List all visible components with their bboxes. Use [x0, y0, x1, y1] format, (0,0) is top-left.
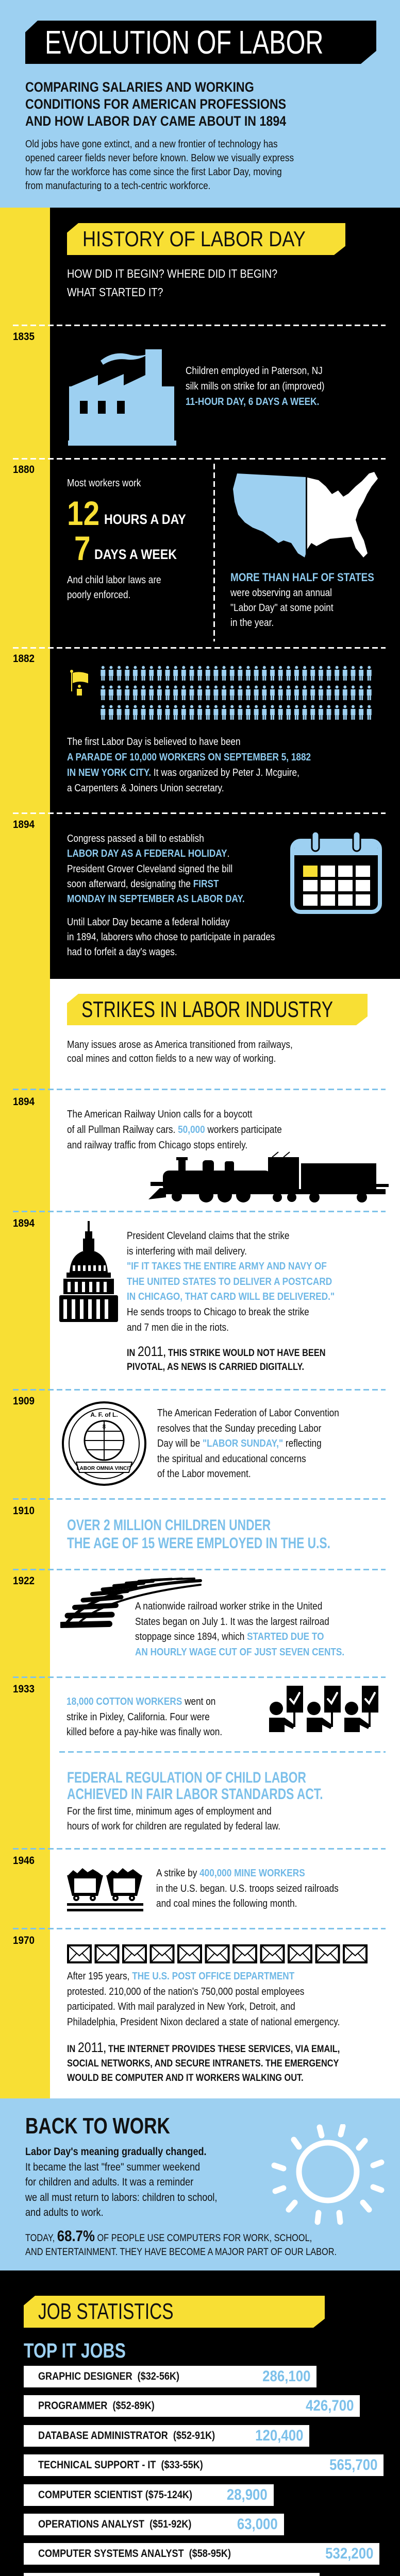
callout: 2011 internet: SOCIAL NETWORKS, AND SECURE INTRANETS. THE EMERGENCY — [67, 2058, 339, 2069]
callout: child labor 1910 — [67, 1517, 330, 1552]
callout: federal regulation: ACHIEVED IN FAIR LABOR STANDARDS ACT. — [67, 1786, 323, 1803]
text 1909: Day will be "LABOR SUNDAY," reflecting — [157, 1438, 322, 1449]
year 1882: 1882 — [13, 653, 35, 665]
intro text: how far the workforce has come since the first Labor Day, moving — [25, 166, 282, 178]
subheading: top IT jobs: TOP IT JOBS — [24, 2340, 126, 2362]
text: more than half of states: MORE THAN HALF OF STATES — [230, 571, 374, 584]
text 1933: 18,000 COTTON WORKERS went on — [66, 1696, 215, 1707]
bar: technical support: TECHNICAL SUPPORT - IT ($33-55K) — [38, 2459, 203, 2471]
callout: 68.7% — [25, 2228, 337, 2258]
callout: child labor 1910: THE AGE OF 15 WERE EMPLOYED IN THE U.S. — [67, 1535, 330, 1552]
bar: database administrator — [24, 2425, 309, 2447]
text: back to work: and adults to work. — [25, 2207, 104, 2218]
callout: 2011 strike — [127, 1344, 326, 1372]
text: 12 hours 7 days: poorly enforced. — [67, 589, 130, 601]
text 1909 — [157, 1408, 339, 1480]
text 1909: The American Federation of Labor Convention — [157, 1408, 339, 1419]
text: back to work: for children and adults. It was a reminder — [25, 2176, 193, 2188]
callout: 68.7%: AND ENTERTAINMENT. THEY HAVE BECOME A MAJOR PART OF OUR LABOR. — [25, 2247, 337, 2258]
icon: US map — [233, 472, 378, 557]
text 1946 — [156, 1868, 339, 1909]
text 1933 — [66, 1696, 222, 1738]
heading: back to work: BACK TO WORK — [25, 2113, 170, 2139]
text 1970: protested. 210,000 of the nation's 750,000 postal employees — [67, 1986, 304, 1997]
icon: calendar — [290, 833, 382, 914]
text cleveland: is interfering with mail delivery. — [127, 1246, 247, 1257]
callout: 2011 internet: IN 2011, THE INTERNET PROVIDES THESE SERVICES, VIA EMAIL, — [67, 2040, 340, 2055]
text: 12 hours 7 days: DAYS A WEEK — [94, 547, 177, 562]
text 1922: States began on July 1. It was the largest railroad — [135, 1616, 329, 1628]
icon: AFL seal: 8 — [103, 1423, 106, 1430]
text: forfeit wages: had to forfeit a day's wages. — [67, 946, 177, 958]
heading: strikes in labor industry: STRIKES IN LABOR INDUSTRY — [81, 997, 333, 1022]
callout: 2011 strike: IN 2011, THIS STRIKE WOULD NOT HAVE BEEN — [127, 1344, 326, 1359]
heading: job statistics: JOB STATISTICS — [38, 2299, 174, 2324]
icon: train — [148, 1151, 389, 1202]
text pullman: of all Pullman Railway cars. 50,000 workers participate — [67, 1124, 282, 1136]
bar: computer systems analyst: 532,200 — [325, 2545, 373, 2562]
bar: database administrator: 120,400 — [255, 2427, 303, 2444]
text: 12 hours 7 days: 7 — [74, 529, 91, 567]
panel: back to work — [0, 2098, 400, 2270]
bar: database administrator: DATABASE ADMINISTRATOR ($52-91K) — [38, 2430, 215, 2442]
questions: HOW DID IT BEGIN? WHERE DID IT BEGIN? — [67, 267, 277, 280]
text 1922: AN HOURLY WAGE CUT OF JUST SEVEN CENTS. — [135, 1647, 344, 1658]
intro text: from manufacturing to a tech-centric workforce. — [25, 180, 210, 192]
icon: sun — [271, 2124, 385, 2225]
text 1946: A strike by 400,000 MINE WORKERS — [156, 1868, 305, 1879]
text 1835: 11-HOUR DAY, 6 DAYS A WEEK. — [186, 396, 319, 408]
text 1909: of the Labor movement. — [157, 1468, 251, 1480]
text 1922: stoppage since 1894, which STARTED DUE TO — [135, 1631, 324, 1642]
icon: AFL seal: A. F. of L. — [90, 1411, 118, 1418]
text: minimum ages — [67, 1806, 280, 1832]
icon: railroad tracks — [60, 1578, 202, 1628]
text: 12 hours 7 days: 12 — [67, 494, 99, 532]
text 1835: Children employed in Paterson, NJ — [186, 365, 323, 377]
questions: WHAT STARTED IT? — [67, 285, 163, 299]
bar: computer systems analyst: COMPUTER SYSTEMS ANALYST ($58-95K) — [38, 2548, 231, 2560]
icon: capitol — [59, 1221, 118, 1322]
subtitle: COMPARING SALARIES AND WORKING — [25, 79, 254, 95]
text: more than half of states: in the year. — [230, 617, 274, 629]
icon: factory — [68, 349, 176, 446]
callout: federal regulation: FEDERAL REGULATION OF CHILD LABOR — [67, 1769, 306, 1786]
year 1894: 1894 — [13, 819, 35, 831]
text: minimum ages: hours of work for children are regulated by federal law. — [67, 1821, 280, 1832]
bar: operations analyst: 63,000 — [237, 2516, 278, 2533]
text cleveland: He sends troops to Chicago to break the strike — [127, 1307, 309, 1318]
background: intro — [0, 0, 400, 208]
callout: 2011 internet: WOULD BE COMPUTER AND IT WORKERS WALKING OUT. — [67, 2073, 304, 2083]
text 1882: a Carpenters & Joiners Union secretary. — [67, 783, 224, 794]
icon: flag bearer — [70, 670, 88, 696]
text cleveland: IN CHICAGO, THAT CARD WILL BE DELIVERED." — [127, 1291, 335, 1302]
text 1933: killed before a pay-hike was finally won. — [66, 1726, 222, 1738]
subtitle: AND HOW LABOR DAY CAME ABOUT IN 1894 — [25, 113, 286, 129]
yellow timeline strip — [0, 208, 50, 2098]
text 1882: A PARADE OF 10,000 WORKERS ON SEPTEMBER 5, 1882 — [67, 752, 311, 763]
text: 12 hours 7 days: And child labor laws are — [67, 574, 161, 586]
subtitle: CONDITIONS FOR AMERICAN PROFESSIONS — [25, 96, 286, 112]
text: back to work — [25, 2146, 217, 2218]
heading: strikes in labor industry — [67, 994, 368, 1025]
bar: operations analyst — [24, 2514, 284, 2535]
year 1933: 1933 — [13, 1683, 35, 1695]
text: more than half of states: were observing an annual — [230, 587, 332, 599]
bar: computer scientist: 28,900 — [227, 2486, 268, 2503]
title — [25, 21, 376, 64]
year 1835: 1835 — [13, 331, 35, 343]
year 1880: 1880 — [13, 464, 35, 476]
year 1922: 1922 — [13, 1575, 35, 1587]
text 1882: IN NEW YORK CITY. It was organized by Peter J. Mcguire, — [67, 767, 299, 778]
text cleveland: President Cleveland claims that the strike — [127, 1230, 289, 1242]
text 1894 federal holiday: LABOR DAY AS A FEDERAL HOLIDAY. — [67, 848, 229, 859]
text 1922 — [135, 1601, 344, 1658]
text 1894 federal holiday: Congress passed a bill to establish — [67, 833, 204, 844]
text 1894 federal holiday: soon afterward, designating the FIRST — [67, 878, 219, 890]
text cleveland: "IF IT TAKES THE ENTIRE ARMY AND NAVY OF — [127, 1261, 327, 1272]
text 1835 — [186, 365, 325, 408]
text: 12 hours 7 days: Most workers work — [67, 478, 141, 489]
year 1910: 1910 — [13, 1505, 35, 1517]
bar: programmer: 426,700 — [306, 2397, 354, 2414]
bar: graphic designer: GRAPHIC DESIGNER ($32-56K) — [38, 2370, 179, 2382]
icon: protesters — [269, 1686, 378, 1732]
bar: network systems analyst — [24, 2573, 320, 2576]
panel: history of labor day — [50, 208, 400, 979]
callout: federal regulation — [67, 1769, 323, 1803]
heading: job statistics — [24, 2296, 325, 2328]
bar chart: top IT jobs — [24, 2366, 384, 2576]
year 1946: 1946 — [13, 1855, 35, 1867]
bar: computer scientist: COMPUTER SCIENTIST ($75-124K) — [38, 2489, 192, 2501]
text 1970: After 195 years, THE U.S. POST OFFICE DEPARTMENT — [67, 1971, 294, 1982]
text cleveland — [127, 1230, 335, 1333]
title: EVOLUTION OF LABOR — [45, 24, 324, 61]
chart: crowd of 10,000 workers — [101, 666, 372, 720]
text 1970: Philadelphia, President Nixon declared a state of national emergency. — [67, 2016, 340, 2028]
text 1909: resolves that the Sunday preceding Labor — [157, 1423, 321, 1434]
text 1922: A nationwide railroad worker strike in the United — [135, 1601, 322, 1612]
bar: technical support — [24, 2454, 384, 2476]
bar: computer scientist — [24, 2484, 274, 2506]
text: forfeit wages — [67, 917, 275, 958]
text 1894 federal holiday: President Grover Cleveland signed the bill — [67, 863, 232, 875]
bar: graphic designer — [24, 2366, 316, 2387]
questions — [67, 267, 277, 299]
callout: 2011 internet — [67, 2040, 340, 2083]
text: 12 hours 7 days: HOURS A DAY — [104, 512, 186, 527]
icon: coal carts — [67, 1868, 143, 1911]
text: 12 hours 7 days — [67, 478, 186, 601]
text: forfeit wages: in 1894, laborers who chose to participate in parades — [67, 931, 275, 943]
heading: history of labor day: HISTORY OF LABOR DAY — [82, 227, 306, 251]
strikes intro: Many issues arose as America transitioned from railways, — [67, 1039, 293, 1050]
bar: graphic designer: 286,100 — [262, 2368, 310, 2385]
bar: operations analyst: OPERATIONS ANALYST ($51-92K) — [38, 2518, 191, 2530]
text 1946: and coal mines the following month. — [156, 1898, 297, 1909]
text: more than half of states: "Labor Day" at some point — [230, 602, 334, 614]
text cleveland: and 7 men die in the riots. — [127, 1322, 229, 1333]
callout: 68.7%: TODAY, 68.7% OF PEOPLE USE COMPUTERS FOR WORK, SCHOOL, — [25, 2228, 312, 2245]
text 1835: silk mills on strike for an (improved) — [186, 381, 325, 392]
text: back to work: we all must return to labors: children to school, — [25, 2192, 217, 2203]
strikes intro — [67, 1039, 293, 1064]
text pullman: The American Railway Union calls for a boycott — [67, 1109, 252, 1120]
text: forfeit wages: Until Labor Day became a federal holiday — [67, 917, 230, 928]
panel: job statistics — [0, 2270, 400, 2576]
intro text — [25, 139, 294, 192]
year 1909: 1909 — [13, 1395, 35, 1407]
intro text: Old jobs have gone extinct, and a new frontier of technology has — [25, 139, 278, 150]
intro text: opened career fields never before known. Below we visually express — [25, 152, 294, 164]
heading: history of labor day — [67, 223, 345, 255]
text 1946: in the U.S. began. U.S. troops seized railroads — [156, 1883, 339, 1894]
icon: AFL seal — [62, 1401, 146, 1486]
text: minimum ages: For the first time, minimum ages of employment and — [67, 1806, 272, 1817]
text 1909: the spiritual and educational concerns — [157, 1453, 306, 1464]
text 1882 — [67, 736, 311, 794]
callout: child labor 1910: OVER 2 MILLION CHILDREN UNDER — [67, 1517, 271, 1534]
bar: technical support: 565,700 — [329, 2456, 377, 2473]
text 1894 federal holiday — [67, 833, 245, 905]
bar: computer systems analyst — [24, 2543, 379, 2565]
text cleveland: THE UNITED STATES TO DELIVER A POSTCARD — [127, 1276, 332, 1287]
callout: 2011 strike: PIVOTAL, AS NEWS IS CARRIED DIGITALLY. — [127, 1362, 304, 1372]
text 1933: strike in Pixley, California. Four were — [66, 1711, 210, 1723]
icon: envelopes — [67, 1944, 368, 1963]
text: more than half of states — [230, 571, 374, 629]
subtitle — [25, 79, 287, 129]
bar: programmer — [24, 2395, 360, 2417]
text pullman: and railway traffic from Chicago stops entirely. — [67, 1140, 247, 1151]
text 1970 — [67, 1971, 340, 2028]
text: back to work: It became the last "free" summer weekend — [25, 2161, 200, 2173]
year 1894 pullman: 1894 — [13, 1096, 35, 1108]
year 1894 cleveland: 1894 — [13, 1217, 35, 1229]
text 1894 federal holiday: MONDAY IN SEPTEMBER AS LABOR DAY. — [67, 893, 245, 905]
text 1970: participated. With mail paralyzed in New York, Detroit, and — [67, 2001, 295, 2012]
text 1882: The first Labor Day is believed to have been — [67, 736, 241, 748]
icon: AFL seal: LABOR OMNIA VINCIT — [77, 1466, 131, 1471]
bar: programmer: PROGRAMMER ($52-89K) — [38, 2400, 155, 2412]
strikes intro: coal mines and cotton fields to a new way of working. — [67, 1053, 276, 1064]
year 1970: 1970 — [13, 1935, 35, 1946]
text: back to work: Labor Day's meaning gradually changed. — [25, 2146, 207, 2158]
text pullman — [67, 1109, 282, 1151]
